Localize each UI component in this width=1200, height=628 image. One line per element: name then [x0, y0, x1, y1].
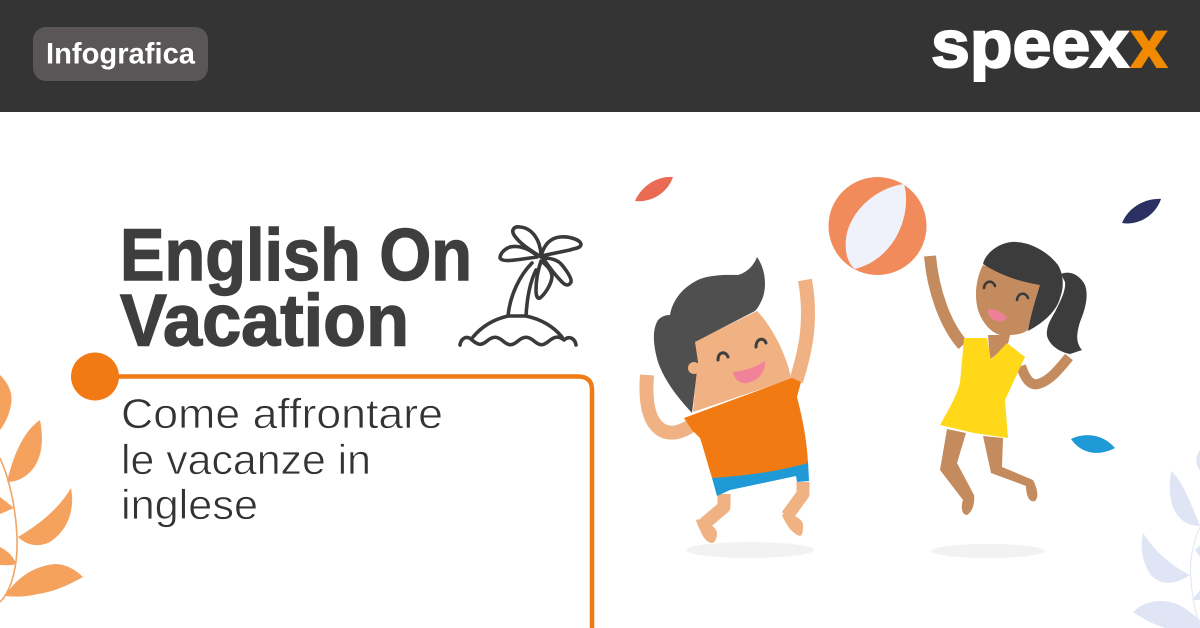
- character: boy: [646, 257, 814, 558]
- icon: palm tree island: [460, 227, 581, 345]
- title: [120, 215, 472, 362]
- subtitle: [121, 390, 443, 528]
- foot: left: [696, 519, 717, 543]
- title: English On: [120, 215, 472, 296]
- logo: speexx: x: [1131, 7, 1167, 82]
- face: [693, 311, 791, 412]
- legs: [940, 429, 974, 515]
- left orange foliage: [0, 375, 83, 602]
- ear: [688, 362, 700, 374]
- shadow: [931, 544, 1045, 558]
- subtitle: le vacanze in: [121, 436, 371, 483]
- dress: [940, 338, 1025, 438]
- character: girl: [930, 242, 1087, 558]
- leaf: red: [635, 177, 673, 201]
- callout frame with orange dot: [71, 352, 592, 628]
- hair: [983, 242, 1063, 331]
- mouth: [988, 309, 1007, 321]
- logo: speexx: speex: [931, 7, 1129, 82]
- subtitle: inglese: [121, 481, 258, 528]
- leaf: navy: [1122, 199, 1161, 223]
- badge: Infografica: [33, 27, 208, 81]
- title: Vacation: [120, 280, 409, 362]
- subtitle: Come affrontare: [121, 390, 443, 437]
- eyes: [718, 339, 766, 360]
- header bar: [0, 0, 1200, 112]
- right pale foliage: [1133, 450, 1200, 628]
- badge: Infografica: Infografica: [46, 38, 195, 70]
- face and neck: [976, 265, 1041, 360]
- shorts: [712, 461, 809, 496]
- leaf: blue: [1071, 435, 1115, 453]
- limbs: [646, 280, 808, 524]
- beach ball: [828, 177, 926, 275]
- ponytail: [1047, 273, 1087, 354]
- ear: [1030, 298, 1040, 310]
- arms: [930, 256, 1069, 384]
- mouth: [733, 361, 765, 383]
- shadow: [686, 542, 814, 558]
- hair: [654, 257, 765, 413]
- shirt: [684, 378, 808, 478]
- eyes: [984, 282, 1028, 300]
- foot: right: [782, 513, 803, 536]
